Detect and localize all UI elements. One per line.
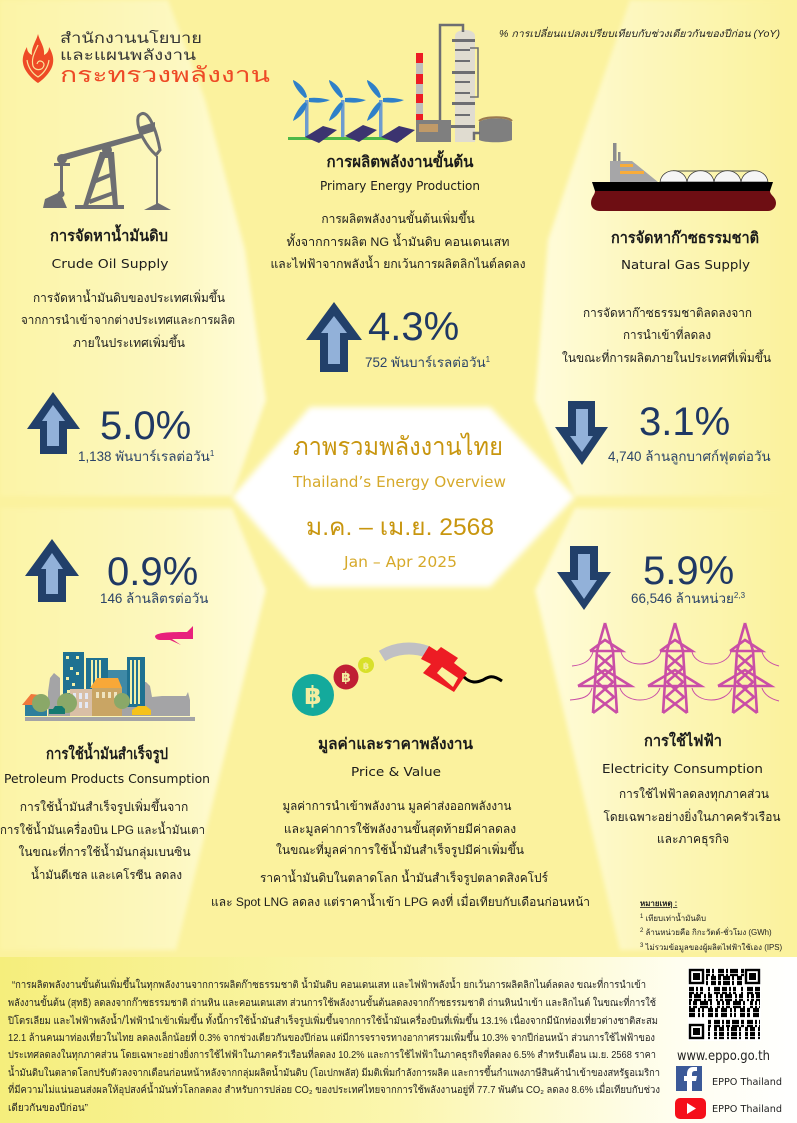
panel: petroleum products consumption: การใช้น้ำมันสำเร็จรูป: [46, 742, 168, 765]
label: facebook: EPPO Thailand: [712, 1077, 782, 1088]
panel: center title: Thailand’s Energy Overview: [292, 473, 506, 491]
panel: electricity consumption: 2,3: [734, 591, 746, 600]
footnotes: 3: [640, 943, 644, 949]
footnotes: [640, 899, 783, 953]
panel: crude oil supply: การจัดหาน้ำมันดิบของประเทศเพิ่มขึ้น: [33, 289, 225, 305]
arrow: crude oil up: [27, 392, 80, 454]
panel: natural gas supply: Natural Gas Supply: [621, 257, 751, 272]
icon: baht coins and fuel nozzle: ฿: [363, 661, 369, 671]
panel: price and value: และ Spot LNG ลดลง แต่ราคาน้ำเข้า LPG คงที่ เมื่อเทียบกับเดือนก่อนหน้า: [211, 893, 590, 909]
furnace: [416, 120, 451, 142]
panel: crude oil supply: [21, 224, 235, 464]
panel: electricity consumption: การใช้ไฟฟ้าลดลงทุกภาคส่วน: [619, 787, 769, 802]
label: youtube: EPPO Thailand: [712, 1104, 782, 1115]
icon: youtube: [675, 1098, 706, 1119]
panel: electricity consumption: [602, 549, 780, 847]
YoY note: % การเปลี่ยนแปลงเปรียบเทียบกับช่วงเดียวกันของปีก่อน (YoY): [499, 26, 780, 40]
panel: primary energy production: 752 พันบาร์เรลต่อวัน: [365, 355, 486, 370]
arrow: electricity down: [557, 546, 611, 610]
panel: natural gas supply: ในขณะที่การผลิตภายในประเทศที่เพิ่มขึ้น: [562, 349, 771, 365]
icon: LNG tanker: [591, 143, 776, 211]
icon: city and plane: [22, 626, 195, 721]
panel: center title: ม.ค. – เม.ย. 2568: [306, 514, 494, 541]
icon: baht coins and fuel nozzle: ฿: [341, 669, 351, 685]
panel: petroleum products consumption: 146 ล้านลิตรต่อวัน: [100, 591, 208, 606]
grass: [288, 137, 402, 140]
chimney: [416, 53, 423, 120]
panel: natural gas supply: การนำเข้าที่ลดลง: [623, 326, 711, 342]
panel: petroleum products consumption: การใช้น้ำมันเครื่องบิน LPG และน้ำมันเตา: [0, 821, 205, 837]
panel: center title: Jan – Apr 2025: [343, 553, 457, 571]
footnotes: ไม่รวมข้อมูลของผู้ผลิตไฟฟ้าใช้เอง (IPS): [643, 943, 783, 953]
panel: price and value: มูลค่าและราคาพลังงาน: [318, 736, 473, 755]
arrow: natural gas down: [555, 401, 608, 465]
storage tank: [479, 118, 512, 142]
skyline back: [48, 673, 190, 716]
panel: electricity consumption: Electricity Consumption: [602, 761, 763, 776]
panel: crude oil supply: Crude Oil Supply: [52, 256, 169, 271]
bottom summary band: [0, 957, 797, 1123]
panel: electricity consumption: 5.9%: [643, 549, 734, 593]
panel: center title: [292, 432, 506, 571]
summary text: น้ำมันดิบในตลาดโลกปรับตัวลงจากเดือนก่อนหน้าหลังจากกลุ่มผลิตน้ำมันดิบ (โอเปกพลัส) มีมติเพิ่มกำลังการผลิต และการขึ้นกำแพงภาษีสินค้านำเข้าของสหรัฐอเมริกา: [8, 1064, 660, 1079]
footnotes: ล้านหน่วยคือ กิกะวัตต์-ชั่วโมง (GWh): [643, 926, 772, 937]
summary text: พลังงานขั้นต้น (สุทธิ) ลดลงจากก๊าซธรรมชาติ ถ่านหิน และคอนเดนเสท ส่วนการใช้พลังงานขั้นต้นลดลงจากก๊าซธรรมชาติ ถ่านหินนำเข้า และลิกไนต์ ในขณะที่การใช้: [8, 994, 656, 1009]
logo: และแผนพลังงาน: [60, 48, 196, 64]
panel: primary energy production: 4.3%: [368, 305, 459, 349]
summary text: เดียวกันของปีก่อน”: [8, 1102, 89, 1114]
panel: electricity consumption: โดยเฉพาะอย่างยิ่งในภาคครัวเรือน: [604, 808, 780, 824]
summary text: 12.1 ล้านคนมาท่องเที่ยวในไทย ลดลงเล็กน้อยที่ 0.3% จากช่วงเดียวกันของปีก่อน แต่มีการจราจรทางอากาศรวมเพิ่มขึ้น 10.3% จากปีก่อนหน้า ส่วนการใช้ไฟฟ้าของ: [8, 1029, 655, 1044]
logo: กระทรวงพลังงาน: [60, 64, 270, 87]
plane: [155, 626, 193, 645]
summary text: ปิโตรเลียม และไฟฟ้าพลังน้ำ/ไฟฟ้านำเข้าเพิ่มขึ้น ทั้งนี้การใช้น้ำมันสำเร็จรูปเพิ่มขึ้นจากการใช้น้ำมันเครื่องบินที่เพิ่มขึ้น 13.1% เนื่องจากมีนักท่องเที่ยวต่างชาติสะสม: [8, 1012, 658, 1027]
footnotes: เทียบเท่าน้ำมันดิบ: [643, 912, 706, 923]
panel: price and value: ในขณะที่มูลค่าการใช้น้ำมันสำเร็จรูปมีค่าเพิ่มขึ้น: [276, 841, 524, 858]
icon: transmission towers: [570, 623, 779, 713]
panel: petroleum products consumption: [0, 550, 210, 882]
agency name: สำนักงานนโยบาย: [60, 29, 202, 47]
panel: petroleum products consumption: ในขณะที่การใช้น้ำมันกลุ่มเบนซิน: [18, 843, 191, 860]
solar panels: [305, 125, 415, 143]
panel: natural gas supply: การจัดหาก๊าซธรรมชาติ: [611, 229, 759, 247]
panel: electricity consumption: การใช้ไฟฟ้า: [644, 731, 722, 750]
panel: price and value: ราคาน้ำมันดิบในตลาดโลก น้ำมันสำเร็จรูปตลาดสิงคโปร์: [260, 869, 549, 886]
panel: electricity consumption: 66,546 ล้านหน่วย: [631, 591, 734, 606]
icon: baht coins and fuel nozzle: ฿: [304, 682, 322, 710]
mid buildings: [70, 689, 93, 716]
summary text: ประเทศลดลงในทุกภาคส่วน โดยเฉพาะอย่างยิ่งการใช้ไฟฟ้าในภาคครัวเรือนที่ลดลง 10.2% และการใช้ไฟฟ้าในภาคธุรกิจที่ลดลง 6.5% สำหรับเดือน เม.ย. 2568 ราคา: [8, 1047, 656, 1061]
panel: crude oil supply: ภายในประเทศเพิ่มขึ้น: [73, 334, 185, 350]
panel: natural gas supply: การจัดหาก๊าซธรรมชาติลดลงจาก: [583, 306, 752, 320]
panel: primary energy production: การผลิตพลังงานขั้นต้นเพิ่มขึ้น: [321, 210, 475, 226]
panel: price and value: [211, 736, 590, 909]
icon: baht coins and fuel nozzle: [292, 646, 502, 716]
wind turbines: [293, 80, 404, 138]
summary text: [8, 976, 660, 1114]
panel: electricity consumption: และภาคธุรกิจ: [657, 832, 729, 847]
panel: crude oil supply: จากการนำเข้าจากต่างประเทศและการผลิต: [21, 313, 235, 327]
panel: price and value: มูลค่าการนำเข้าพลังงาน มูลค่าส่งออกพลังงาน: [282, 799, 512, 814]
panel: petroleum products consumption: การใช้น้ำมันสำเร็จรูปเพิ่มขึ้นจาก: [20, 798, 188, 815]
icon: QR code: [688, 968, 761, 1041]
footnotes: 2: [640, 928, 644, 934]
panel: natural gas supply: 3.1%: [639, 400, 730, 444]
panel: petroleum products consumption: 0.9%: [107, 550, 198, 594]
panel: price and value: และมูลค่าการใช้พลังงานขั้นสุดท้ายมีค่าลดลง: [284, 820, 516, 837]
trees: [32, 694, 50, 712]
distillation column: [455, 30, 475, 142]
panel: crude oil supply: 5.0%: [100, 404, 191, 448]
summary text: “การผลิตพลังงานขั้นต้นเพิ่มขึ้นในทุกพลังงานจากการผลิตก๊าซธรรมชาติ น้ำมันดิบ คอนเดนเสท และไฟฟ้าพลังน้ำ ยกเว้นการผลิตลิกไนต์ลดลง ขณะที่การนำเข้า: [12, 976, 646, 991]
panel: primary energy production: ทั้งจากการผลิต NG น้ำมันดิบ คอนเดนเสท: [286, 233, 510, 249]
panel: price and value: Price & Value: [351, 764, 441, 779]
arrow: petroleum up: [25, 539, 79, 602]
panel: natural gas supply: 4,740 ล้านลูกบาศก์ฟุตต่อวัน: [608, 449, 771, 465]
panel: primary energy production: 1: [486, 355, 491, 364]
panel: petroleum products consumption: Petroleum Products Consumption: [4, 771, 210, 786]
cars: [49, 706, 65, 714]
panel: primary energy production: และไฟฟ้าจากพลังน้ำ ยกเว้นการผลิตลิกไนต์ลดลง: [270, 255, 526, 271]
footnotes: 1: [640, 914, 644, 920]
icon: energy plant: [288, 25, 512, 143]
icon: flame: [23, 34, 53, 83]
panel: primary energy production: [270, 150, 526, 370]
panel: crude oil supply: 1,138 พันบาร์เรลต่อวัน: [78, 449, 210, 464]
panel: primary energy production: การผลิตพลังงานขั้นต้น: [326, 150, 474, 171]
icon: pump jack: [43, 113, 171, 210]
ground: [25, 717, 195, 721]
towers: [63, 652, 84, 710]
website: www.eppo.go.th: [677, 1048, 770, 1064]
footnotes: หมายเหตุ :: [640, 899, 677, 909]
panel: primary energy production: Primary Energy Production: [320, 178, 480, 193]
panel: crude oil supply: การจัดหาน้ำมันดิบ: [50, 224, 168, 245]
panel: natural gas supply: [562, 229, 771, 465]
arrow: primary production up: [306, 302, 362, 372]
panel: petroleum products consumption: น้ำมันดีเซล และเคโรซีน ลดลง: [31, 866, 182, 882]
panel: center title: ภาพรวมพลังงานไทย: [293, 432, 503, 461]
panel: crude oil supply: 1: [210, 449, 215, 458]
icon: facebook: [676, 1066, 702, 1091]
summary text: ที่มีความไม่แน่นอนส่งผลให้อุปสงค์น้ำมันทั่วโลกลดลง สำหรับการปล่อย CO₂ ของประเทศไทยจากการใช้พลังงานอยู่ที่ 77.7 พันตัน CO₂ ลดลง 8.6% เมื่อเทียบกับช่วง: [8, 1081, 660, 1096]
logo: [23, 29, 270, 87]
